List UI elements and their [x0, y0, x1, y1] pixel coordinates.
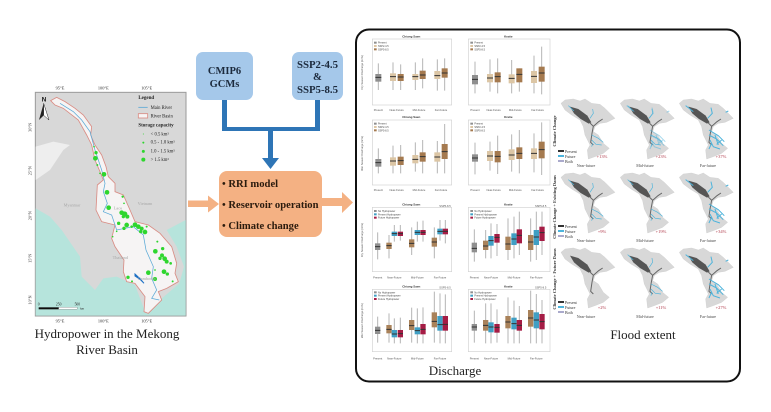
- row: climate change: +23%: [656, 154, 667, 159]
- chart: Chiang Saen wet hydropower: Mid-Future: [411, 356, 424, 360]
- box: SSP scenarios: [292, 52, 343, 100]
- chart: Kratie dry hydropower: Far-Future: [530, 276, 543, 280]
- chart: Chiang Saen dry hydropower: Present Hydropower: [378, 213, 401, 216]
- country labels: Vietnam: [138, 201, 153, 206]
- chart: Chiang Saen wet hydropower: Future Hydropower: [378, 298, 399, 301]
- scale bar: 250: [56, 302, 62, 306]
- row: climate change + existing dams: [552, 173, 733, 243]
- longitude labels: [56, 85, 152, 324]
- row: climate change + existing dams: +34%: [716, 229, 727, 234]
- chart: Chiang Saen wet season: SSP2-4.5: [378, 126, 389, 129]
- longitude labels: 95°E: [56, 319, 65, 324]
- chart: Chiang Saen wet hydropower: Far-Future: [434, 356, 447, 360]
- chart: Chiang Saen dry season: Far-Future: [435, 108, 448, 112]
- latitude labels: 25°N: [28, 165, 33, 175]
- row: climate change + future dams: Both: [565, 310, 573, 315]
- box: SSP scenarios: SSP5-8.5: [297, 84, 338, 96]
- chart: Chiang Saen dry season: Present: [378, 42, 387, 45]
- latitude labels: 10°N: [28, 295, 33, 305]
- chart: Chiang Saen dry hydropower: Near-Future: [387, 276, 402, 280]
- row: climate change: Climate Change: [552, 115, 557, 147]
- row: climate change: Both: [565, 159, 573, 164]
- chart: Chiang Saen dry season: Near-Future: [390, 108, 404, 112]
- map caption: Hydropower in the Mekong: [35, 326, 180, 341]
- chart: Kratie wet hydropower: No Hydropower: [474, 291, 492, 294]
- chart: Chiang Saen dry hydropower: Mid-Future: [411, 276, 424, 280]
- scale bar: 500: [75, 302, 80, 306]
- box: model: • Climate change: [222, 221, 299, 232]
- map snow-light terrain: [36, 142, 70, 180]
- chart: Chiang Saen wet hydropower: No Hydropower: [378, 291, 395, 294]
- chart: Chiang Saen dry season: Dry Season Discharge (m³/s): [360, 55, 364, 89]
- row: climate change + existing dams: +9%: [598, 229, 607, 234]
- legend: > 1.5 km³: [151, 157, 169, 163]
- chart: Chiang Saen dry hydropower: Present: [373, 276, 383, 280]
- row: climate change + existing dams: Near-future: [577, 238, 596, 243]
- chart: Kratie wet season: SSP5-8.5: [474, 129, 486, 132]
- flood extent caption: Flood extent: [610, 327, 676, 342]
- north arrow: N: [42, 96, 47, 103]
- row: climate change + existing dams: +19%: [656, 229, 667, 234]
- row: climate change + existing dams: Present: [565, 224, 578, 229]
- box: SSP scenarios: SSP2-4.5: [297, 59, 338, 71]
- chart: Chiang Saen dry hydropower: Future Hydropower: [378, 217, 399, 220]
- country labels: Thailand: [113, 255, 129, 260]
- chart: Chiang Saen dry hydropower: Dry Season Discharge (m³/s): [360, 223, 364, 257]
- chart: Chiang Saen wet season: Far-Future: [435, 188, 448, 192]
- chart: Kratie dry hydropower: Mid-Future: [508, 276, 521, 280]
- row: climate change + existing dams: Future: [565, 229, 576, 234]
- row: climate change + existing dams: Both: [565, 234, 573, 239]
- chart: Kratie dry hydropower: [468, 203, 550, 280]
- legend: < 0.5 km³: [151, 131, 169, 137]
- row: climate change + future dams: +27%: [716, 305, 727, 310]
- row: climate change: +13%: [597, 154, 608, 159]
- map caption: River Basin: [76, 342, 138, 357]
- discharge caption: Discharge: [429, 363, 481, 378]
- row: climate change: [552, 99, 733, 168]
- row: climate change + future dams: Near-future: [577, 314, 596, 319]
- north arrow: [39, 96, 49, 120]
- chart: Chiang Saen wet season: SSP5-8.5: [378, 129, 389, 132]
- chart: Kratie wet season: Present: [470, 188, 480, 192]
- row: climate change + existing dams: Climate Change + Existing Dams: [552, 175, 557, 239]
- chart: Chiang Saen wet season: Present: [374, 188, 383, 192]
- row: climate change + future dams: Future: [565, 305, 576, 310]
- box: SSP scenarios: &: [313, 71, 322, 83]
- longitude labels: 100°E: [98, 319, 109, 324]
- chart: Kratie wet season: Near-Future: [487, 188, 501, 192]
- chart: Chiang Saen wet season: Mid-Future: [413, 188, 426, 192]
- latitude labels: 30°N: [28, 122, 33, 132]
- row: climate change + future dams: +11%: [656, 305, 667, 310]
- chart: Kratie wet hydropower: SSP5-8.5: [535, 286, 547, 290]
- chart: Chiang Saen wet season: Chiang Saen: [402, 115, 421, 119]
- chart: Chiang Saen dry hydropower: Far-Future: [434, 276, 447, 280]
- charts: discharge lower: [360, 203, 550, 360]
- chart: Kratie dry season: Mid-Future: [509, 108, 522, 112]
- chart: Kratie dry hydropower: No Hydropower: [474, 210, 492, 213]
- chart: Kratie wet hydropower: Far-Future: [530, 356, 543, 360]
- row: climate change + future dams: Far-future: [700, 314, 716, 319]
- chart: Chiang Saen dry hydropower: [360, 203, 452, 280]
- legend: Legend: [138, 96, 154, 101]
- chart: Kratie dry season: Far-Future: [531, 108, 544, 112]
- scale bar: 0: [38, 302, 40, 306]
- row: climate change: Mid-future: [636, 163, 654, 168]
- row: climate change: +37%: [716, 154, 727, 159]
- charts: discharge upper: [360, 34, 550, 192]
- chart: Chiang Saen wet hydropower: Present Hydropower: [378, 295, 401, 298]
- chart: Kratie dry hydropower: SSP5-8.5: [535, 204, 547, 208]
- box: CMIP6: CMIP6: [208, 66, 241, 77]
- chart: Kratie wet season: Kratie: [504, 115, 513, 119]
- row: climate change + future dams: Climate Change + Future Dams: [552, 248, 557, 310]
- chart: Kratie wet season: Far-Future: [531, 188, 544, 192]
- row: climate change: Future: [565, 154, 576, 159]
- legend: 0.5 - 1.0 km³: [151, 140, 175, 146]
- row: climate change: Far-future: [700, 163, 716, 168]
- chart: Kratie dry season: Present: [474, 42, 483, 45]
- legend: 1.0 - 1.5 km³: [151, 148, 175, 154]
- box: model: • Reservoir operation: [222, 200, 319, 211]
- chart: Chiang Saen dry hydropower: Chiang Saen: [402, 203, 421, 207]
- Tonle Sap lake: [135, 274, 144, 283]
- chart: Kratie dry season: SSP5-8.5: [474, 48, 486, 51]
- chart: Chiang Saen dry hydropower: No Hydropower: [378, 210, 395, 213]
- box: model: [219, 171, 322, 237]
- panel: hydropower map: [28, 85, 186, 324]
- row: climate change + future dams: Mid-future: [636, 314, 654, 319]
- arrow: model to results: [322, 192, 353, 213]
- longitude labels: 105°E: [141, 85, 152, 90]
- country labels: Cambodia: [138, 276, 156, 281]
- legend: River Basin: [151, 115, 173, 120]
- chart: Chiang Saen wet hydropower: Chiang Saen: [402, 284, 421, 288]
- chart: Kratie wet hydropower: Mid-Future: [508, 356, 521, 360]
- chart: Kratie wet hydropower: Kratie: [504, 284, 513, 288]
- chart: Chiang Saen dry season: Chiang Saen: [402, 34, 421, 38]
- arrow: map to model: [188, 196, 219, 212]
- chart: Kratie dry hydropower: Present: [470, 276, 479, 280]
- chart: Kratie dry hydropower: Near-Future: [484, 276, 499, 280]
- results panel frame: [356, 30, 740, 382]
- legend: Main River: [151, 106, 172, 111]
- chart: Chiang Saen wet season: Present: [378, 123, 387, 126]
- flow diagram: [188, 52, 353, 237]
- chart: Kratie dry hydropower: Future Hydropower: [474, 217, 496, 220]
- chart: Kratie dry season: Near-Future: [487, 108, 501, 112]
- chart: Chiang Saen wet hydropower: Wet Season Discharge (m³/s): [360, 303, 364, 338]
- scale bar: km: [80, 306, 85, 310]
- chart: Chiang Saen dry hydropower: SSP5-8.5: [439, 204, 451, 208]
- flood maps: [552, 99, 733, 319]
- row: climate change + future dams: +2%: [598, 305, 607, 310]
- chart: Chiang Saen wet season: [360, 115, 452, 192]
- arrow: merged blue connector: [222, 100, 320, 169]
- box: CMIP6: [196, 52, 253, 100]
- map sea: [36, 208, 186, 316]
- chart: Kratie dry season: Kratie: [504, 34, 513, 38]
- chart: Kratie wet season: [468, 115, 550, 192]
- longitude labels: 100°E: [98, 85, 109, 90]
- chart: Kratie wet season: SSP2-4.5: [474, 126, 486, 129]
- box: model: • RRI model: [222, 179, 278, 190]
- chart: Chiang Saen wet hydropower: [360, 284, 452, 360]
- main river: [60, 103, 159, 300]
- country labels: Myanmar: [64, 202, 81, 207]
- chart: Kratie wet hydropower: Near-Future: [484, 356, 499, 360]
- row: climate change + future dams: Present: [565, 300, 578, 305]
- chart: Kratie dry hydropower: Kratie: [504, 203, 513, 207]
- chart: Chiang Saen dry season: [360, 34, 452, 112]
- chart: Chiang Saen wet hydropower: SSP5-8.5: [439, 286, 451, 290]
- latitude labels: 15°N: [28, 253, 33, 263]
- chart: Chiang Saen dry season: SSP5-8.5: [378, 48, 389, 51]
- latitude labels: 20°N: [28, 210, 33, 220]
- chart: Kratie dry season: [468, 34, 550, 112]
- scale bar: [38, 302, 85, 310]
- basin polygon: [51, 97, 178, 313]
- row: climate change + existing dams: Mid-future: [636, 238, 654, 243]
- chart: Chiang Saen wet hydropower: Near-Future: [387, 356, 402, 360]
- row: climate change + future dams: [552, 248, 733, 319]
- chart: Kratie wet hydropower: [468, 284, 550, 360]
- box: CMIP6: GCMs: [210, 79, 239, 90]
- dams: [93, 146, 174, 282]
- chart: Kratie dry hydropower: Present Hydropower: [474, 213, 497, 216]
- row: climate change + existing dams: Far-future: [700, 238, 716, 243]
- chart: Chiang Saen dry season: SSP2-4.5: [378, 45, 389, 48]
- country labels: [64, 201, 156, 281]
- longitude labels: 95°E: [56, 85, 65, 90]
- chart: Kratie dry season: SSP2-4.5: [474, 45, 486, 48]
- longitude labels: 105°E: [141, 319, 152, 324]
- chart: Chiang Saen dry season: Present: [374, 108, 383, 112]
- latitude labels: [28, 122, 33, 305]
- row: climate change: Present: [565, 149, 578, 154]
- chart: Kratie wet season: Present: [474, 123, 483, 126]
- country labels: Laos: [114, 205, 123, 210]
- chart: Chiang Saen dry season: Mid-Future: [413, 108, 426, 112]
- chart: Kratie wet hydropower: Future Hydropower: [474, 298, 496, 301]
- legend: [138, 96, 175, 163]
- row: climate change: Near-future: [577, 163, 596, 168]
- chart: Kratie dry season: Present: [470, 108, 480, 112]
- legend: Storage capacity: [138, 124, 174, 129]
- chart: Kratie wet season: Mid-Future: [509, 188, 522, 192]
- chart: Kratie wet hydropower: Present Hydropower: [474, 295, 497, 298]
- chart: Chiang Saen wet hydropower: Present: [373, 356, 383, 360]
- chart: Chiang Saen wet season: Near-Future: [390, 188, 404, 192]
- chart: Kratie wet hydropower: Present: [470, 356, 479, 360]
- map background land: [35, 92, 186, 316]
- chart: Chiang Saen wet season: Wet Season Discharge (m³/s): [360, 136, 364, 171]
